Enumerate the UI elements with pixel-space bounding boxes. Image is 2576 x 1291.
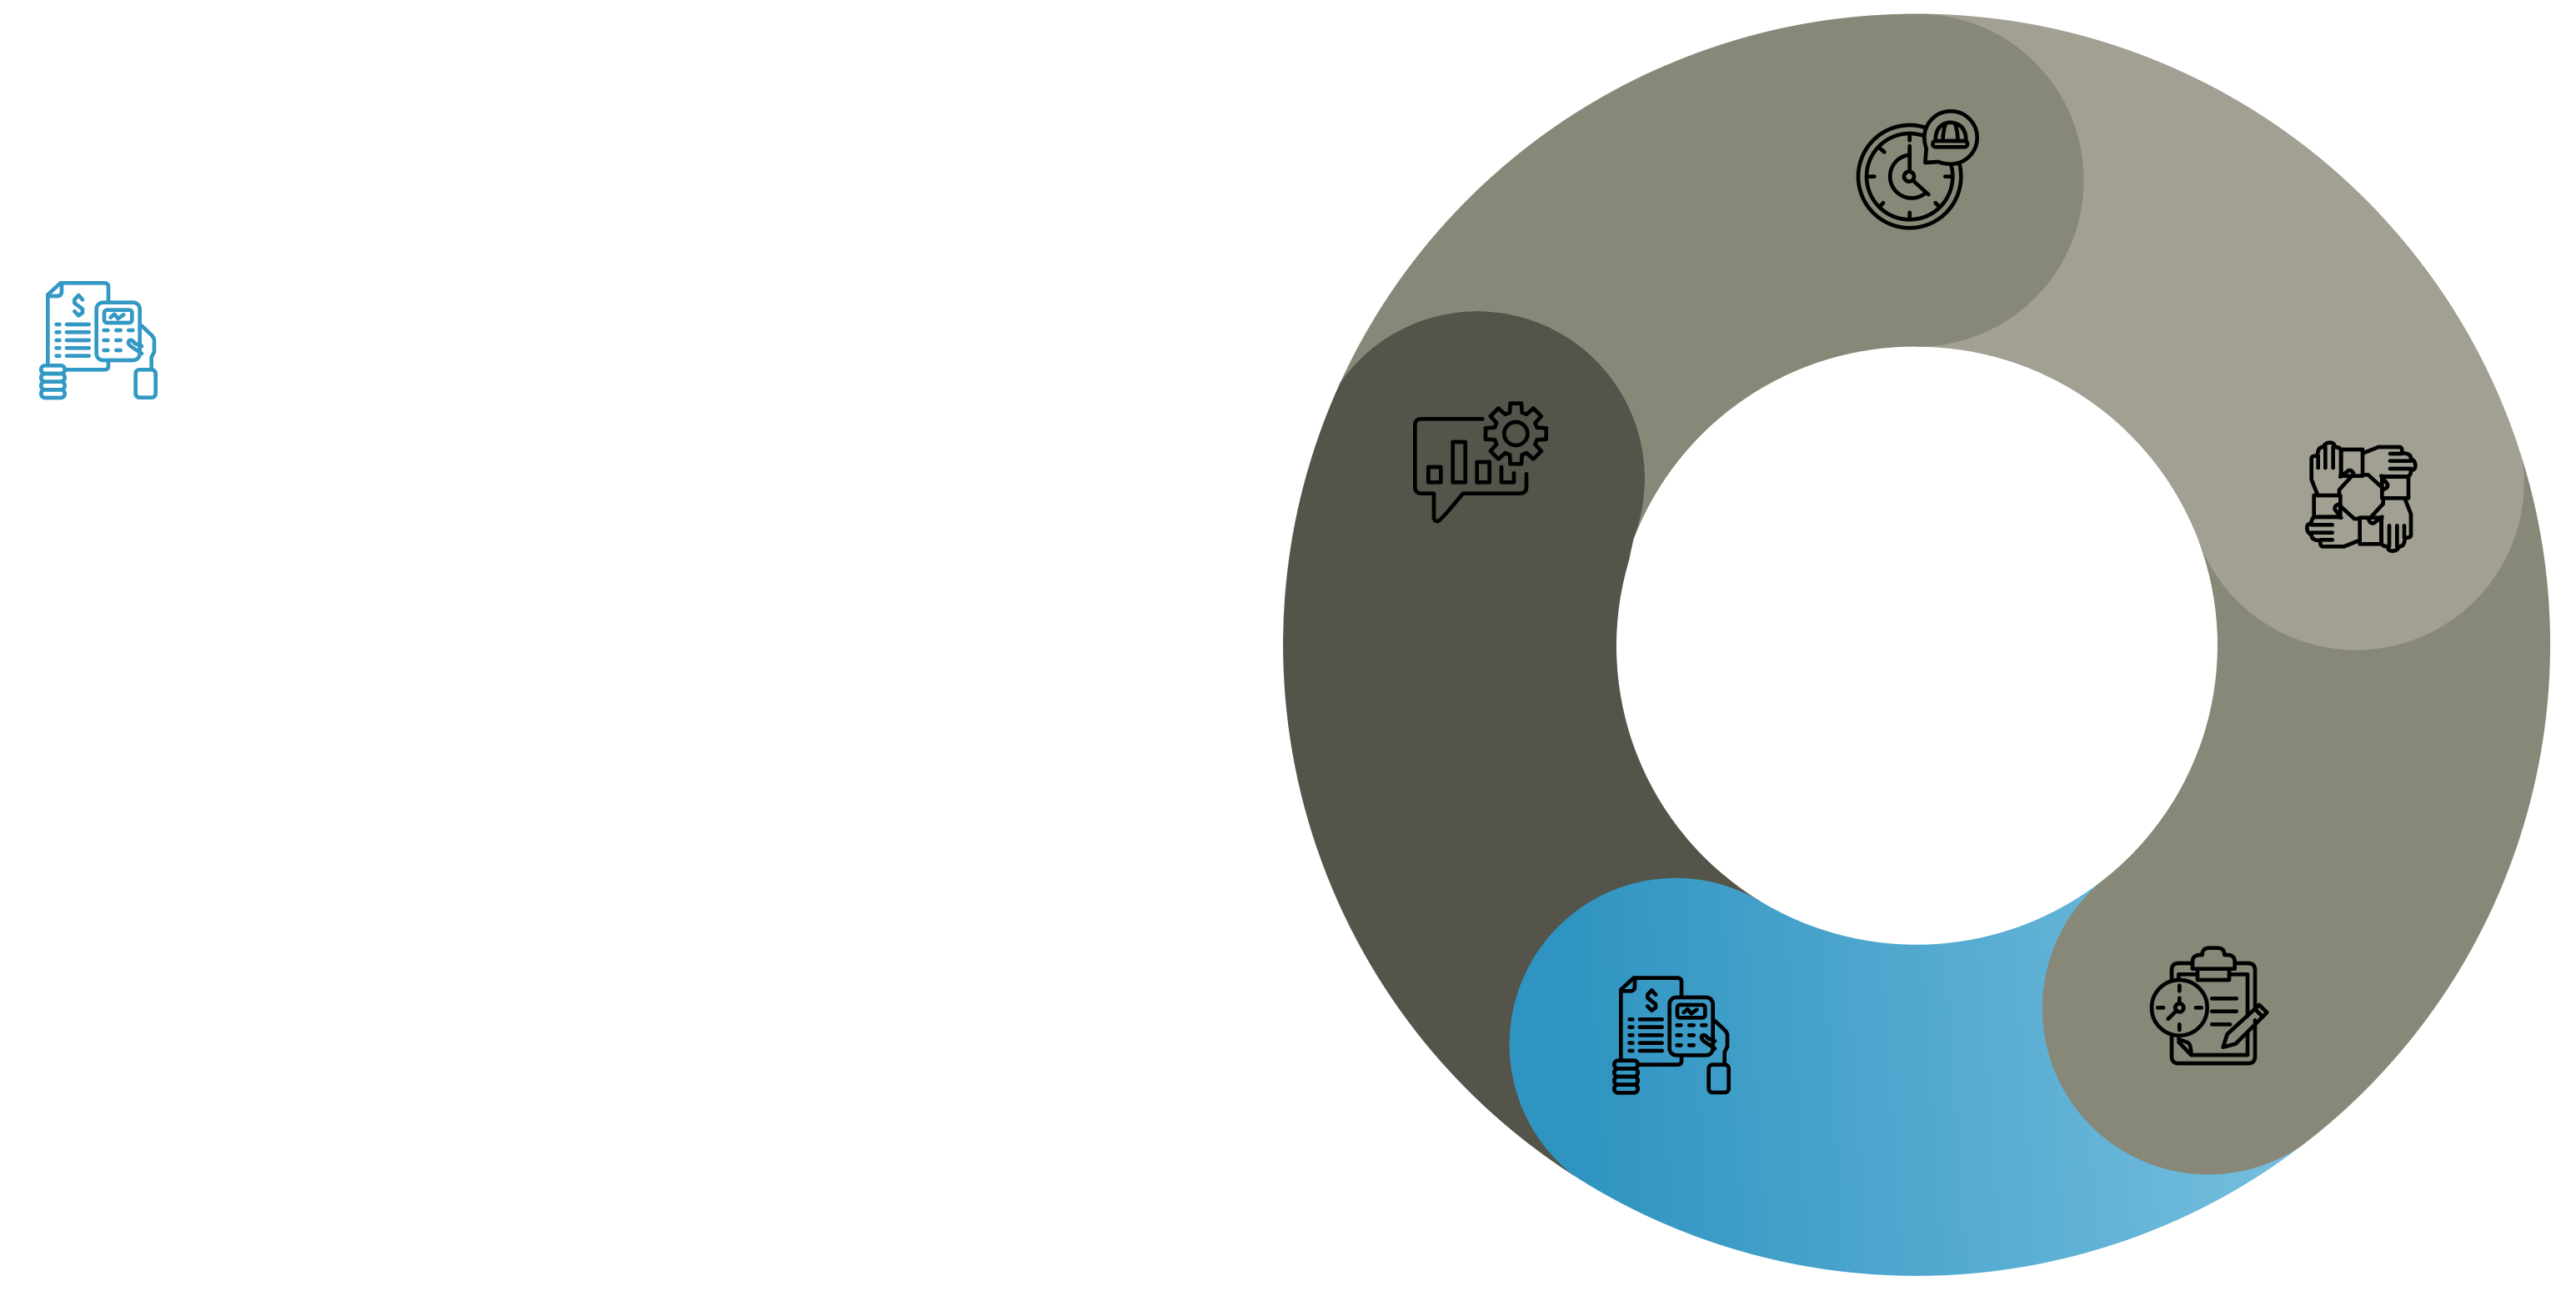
- icon: chat bubble with bar chart and gear: [1415, 404, 1546, 521]
- ring segment: olive grey (right): [2042, 460, 2550, 1174]
- ring segment: olive grey (top left): [1341, 13, 2084, 540]
- icon: clock with hard hat: [1858, 111, 1977, 228]
- icon: clipboard with clock and pencil: [2152, 948, 2267, 1063]
- ring segment: light grey (top right): [1917, 13, 2524, 651]
- ring segment: blue gradient (bottom): [1510, 878, 2303, 1276]
- ring segment: dark grey (left): [1283, 311, 1762, 1175]
- icon: four hands linked: [2307, 443, 2415, 551]
- icon: finance document and calculator (black, on blue segment): [1614, 978, 1729, 1093]
- icon: finance document and calculator (blue, left): [41, 283, 156, 398]
